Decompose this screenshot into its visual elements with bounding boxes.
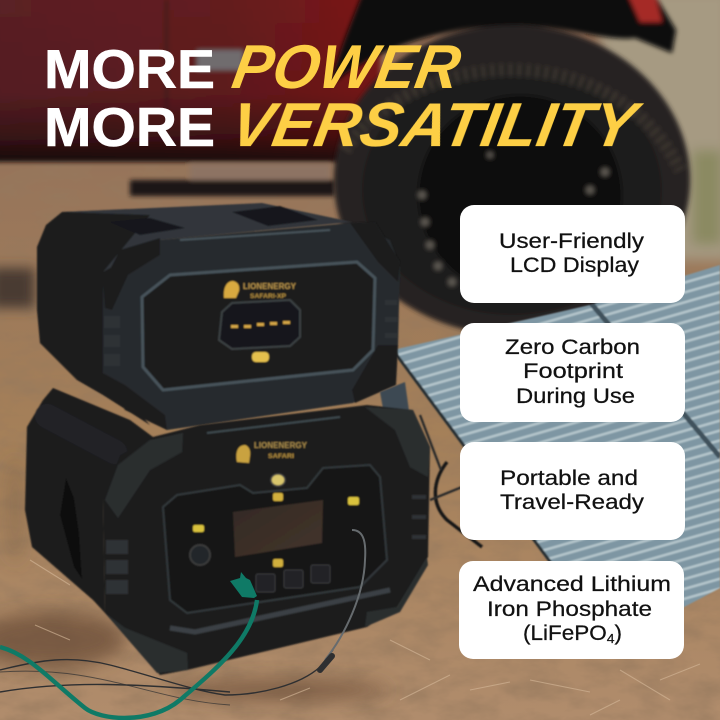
card: portable: Portable and bbox=[500, 467, 638, 490]
headline line 1: POWER bbox=[228, 32, 466, 102]
bottom battery: Safari bbox=[25, 382, 430, 675]
ground bbox=[0, 160, 720, 720]
brand name: LIONENERGY bbox=[254, 441, 308, 450]
card: LiFePO4: Advanced Lithium bbox=[473, 573, 671, 596]
tree emblem bbox=[60, 478, 82, 579]
grey power cord bbox=[325, 530, 365, 660]
straw on the ground bbox=[30, 560, 700, 715]
handles bbox=[110, 206, 318, 235]
green extension cord bbox=[0, 572, 257, 718]
solar panel bbox=[396, 264, 720, 608]
card: portable: Travel-Ready bbox=[500, 491, 645, 514]
casing highlight bbox=[180, 230, 330, 240]
side ribs bbox=[106, 495, 426, 594]
tire bbox=[330, 0, 690, 335]
casing highlight bbox=[207, 417, 340, 433]
battery side bbox=[37, 208, 165, 425]
outlets bbox=[256, 565, 330, 592]
headline line 1 bbox=[44, 32, 466, 102]
card: zero carbon: Footprint bbox=[523, 360, 623, 383]
front panel bbox=[142, 262, 375, 390]
card: zero carbon bbox=[460, 323, 685, 422]
card: portable bbox=[460, 442, 685, 540]
brand logo bbox=[236, 441, 308, 463]
card: zero carbon: During Use bbox=[516, 385, 635, 408]
feature cards bbox=[459, 205, 685, 659]
buttons bbox=[190, 474, 359, 567]
model name: SAFARI-XP bbox=[250, 293, 287, 300]
tail light bbox=[628, 0, 662, 22]
card: LiFePO4: ) bbox=[615, 622, 622, 645]
card: zero carbon: Zero Carbon bbox=[505, 336, 640, 359]
card: LCD display bbox=[460, 205, 685, 303]
card: LiFePO4: (LiFePO bbox=[523, 622, 601, 645]
card: LCD display: LCD Display bbox=[510, 254, 640, 277]
headline line 1: MORE bbox=[44, 38, 215, 100]
brand name: LIONENERGY bbox=[243, 282, 297, 291]
front casing bbox=[103, 405, 430, 675]
truck fender bbox=[330, 0, 676, 85]
card: LiFePO4: 4 bbox=[607, 631, 615, 646]
brand logo bbox=[224, 281, 297, 300]
front casing bbox=[103, 223, 400, 430]
LED indicator display bbox=[219, 300, 300, 349]
power button bbox=[252, 352, 269, 362]
headline line 2: MORE bbox=[44, 96, 215, 158]
top battery: Safari XP bbox=[37, 203, 400, 430]
headline bbox=[44, 32, 647, 160]
icon: lion bbox=[236, 445, 250, 463]
ground shadow bbox=[0, 455, 390, 700]
headline line 2: VERSATILITY bbox=[226, 90, 647, 160]
headline line 2 bbox=[44, 90, 647, 160]
side ribs bbox=[104, 300, 397, 366]
inline cord connector bbox=[320, 656, 332, 670]
distant background at right bbox=[0, 0, 720, 308]
battery top bbox=[62, 203, 352, 272]
model name: SAFARI bbox=[268, 453, 294, 460]
blue-grey back strip bbox=[380, 382, 410, 420]
front control panel bbox=[163, 465, 387, 613]
LCD screen bbox=[233, 500, 323, 557]
card: LCD display: User-Friendly bbox=[499, 230, 645, 253]
thin grey cables bbox=[0, 650, 333, 705]
icon: lion bbox=[224, 281, 239, 298]
card: LiFePO4 bbox=[459, 561, 684, 659]
handle bbox=[47, 416, 115, 452]
card: LiFePO4: Iron Phosphate bbox=[487, 598, 652, 621]
battery side bbox=[25, 388, 153, 613]
corner bumpers bbox=[103, 222, 400, 430]
green plug bbox=[230, 572, 257, 598]
truck body bbox=[0, 0, 380, 196]
corner bumpers bbox=[105, 407, 430, 673]
